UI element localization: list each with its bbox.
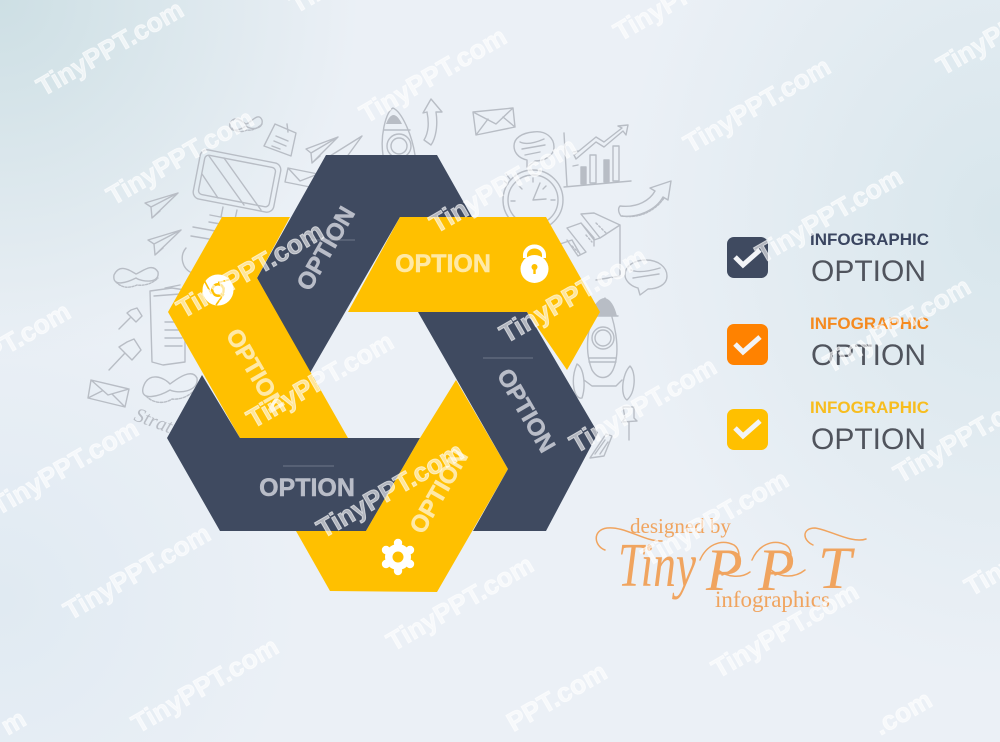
- watermark pattern: TinyPPT.com: [101, 103, 259, 211]
- divider: navy top: [310, 239, 355, 241]
- watermark pattern: .com: [868, 684, 937, 741]
- watermark pattern: TinyPPT.com: [424, 131, 582, 239]
- legend text: navy: OPTION: [811, 255, 926, 288]
- doodle: curved right arrow: [619, 181, 671, 217]
- doodle: infinity top: [230, 117, 262, 132]
- band: navy top: [257, 155, 472, 373]
- watermark pattern: TinyPPT.com: [311, 436, 469, 544]
- doodle: speech bubble right: [625, 260, 667, 295]
- logo word: Tiny: Tiny: [618, 532, 696, 600]
- logo line: designed by: designed by: [630, 514, 731, 538]
- checkbox: navy: [727, 237, 768, 278]
- logo letter: P: P: [757, 537, 795, 603]
- doodle: infinity left: [114, 268, 158, 287]
- watermark pattern: TinyPPT.com: [58, 518, 216, 626]
- divider: navy bottom: [283, 465, 334, 467]
- legend text: yellow: OPTION: [811, 423, 926, 456]
- watermark pattern: TinyPPT.com: [354, 21, 512, 129]
- band: yellow left: [168, 217, 348, 438]
- watermark pattern: TinyPPT.com: [564, 351, 722, 459]
- doodle: envelope top right: [473, 108, 515, 135]
- doodle: rocket right: [573, 298, 634, 400]
- doodle: monitor: [182, 149, 282, 273]
- divider: navy right: [483, 357, 533, 359]
- icon: padlock: [520, 246, 548, 283]
- doodle: infinity lower left: [143, 374, 197, 402]
- doodle: envelope top left: [285, 168, 318, 188]
- checkbox: orange: [727, 324, 768, 365]
- label: yellow left option: OPTION: [220, 324, 289, 417]
- legend heading: orange: INFOGRAPHIC: [810, 314, 929, 333]
- icon: gear: [382, 539, 414, 575]
- label: navy top option: OPTION: [292, 202, 361, 295]
- doodle: handwritten word: Strat: [131, 404, 176, 438]
- watermark pattern: TinyPPT.com: [678, 51, 836, 159]
- legend heading: navy: INFOGRAPHIC: [810, 230, 929, 249]
- legend item: navy: [727, 230, 929, 288]
- legend item: yellow: [727, 398, 929, 456]
- label: navy right option: OPTION: [491, 364, 560, 457]
- doodle: rocket top: [382, 108, 415, 158]
- doodle illustrations: [88, 99, 671, 458]
- doodle: paper planes: [145, 136, 362, 255]
- legend heading: yellow: INFOGRAPHIC: [810, 398, 929, 417]
- watermark pattern: TinyPPT.com: [381, 549, 539, 657]
- label: yellow bottom option: OPTION: [405, 445, 474, 538]
- band: yellow top right: [348, 217, 600, 370]
- watermark pattern: TinyPPT.com: [241, 326, 399, 434]
- doodle: push pins: [109, 308, 142, 370]
- watermark pattern: TinyPPT.com: [750, 161, 908, 269]
- watermark pattern: TinyPPT.com: [171, 216, 329, 324]
- doodle: curved up arrow: [423, 99, 442, 145]
- doodle: growth chart: [564, 125, 631, 187]
- label: navy bottom option: OPTION: [259, 474, 355, 502]
- doodle: speech bubble: [514, 132, 554, 167]
- doodle: envelope left: [88, 380, 129, 407]
- band: navy bottom: [167, 375, 420, 531]
- doodle: striped box: [590, 434, 612, 458]
- doodle: clock: [503, 170, 563, 230]
- logo letter: P: P: [705, 537, 743, 603]
- doodle: pin right: [622, 407, 637, 440]
- watermark pattern: TinyPPT.com: [818, 271, 976, 379]
- doodle: clipboard: [150, 285, 185, 365]
- checkbox: yellow: [727, 409, 768, 450]
- logo: designed by TinyPPT infographics: [596, 514, 866, 612]
- watermark pattern: TinyPPT.com: [636, 464, 794, 572]
- band: navy right: [418, 312, 598, 531]
- icon: chrome circle: [202, 274, 234, 306]
- legend: [727, 230, 929, 456]
- logo letter: T: T: [818, 535, 855, 601]
- doodle: note: [264, 124, 296, 156]
- hexagonal knot diagram: [167, 155, 600, 592]
- logo line: infographics: infographics: [715, 587, 830, 612]
- label: yellow top option: OPTION: [395, 250, 491, 278]
- watermark pattern: TinyPPT.com: [494, 241, 652, 349]
- logo flourish: [596, 528, 866, 576]
- doodle: stairs: [560, 213, 620, 280]
- legend text: orange: OPTION: [811, 339, 926, 372]
- watermark pattern: PPT.com: [501, 656, 612, 737]
- legend item: orange: [727, 314, 929, 372]
- watermark pattern: TinyPPT.com: [126, 631, 284, 739]
- band: yellow bottom right: [296, 380, 508, 592]
- watermark pattern: TinyPPT.com: [706, 576, 864, 684]
